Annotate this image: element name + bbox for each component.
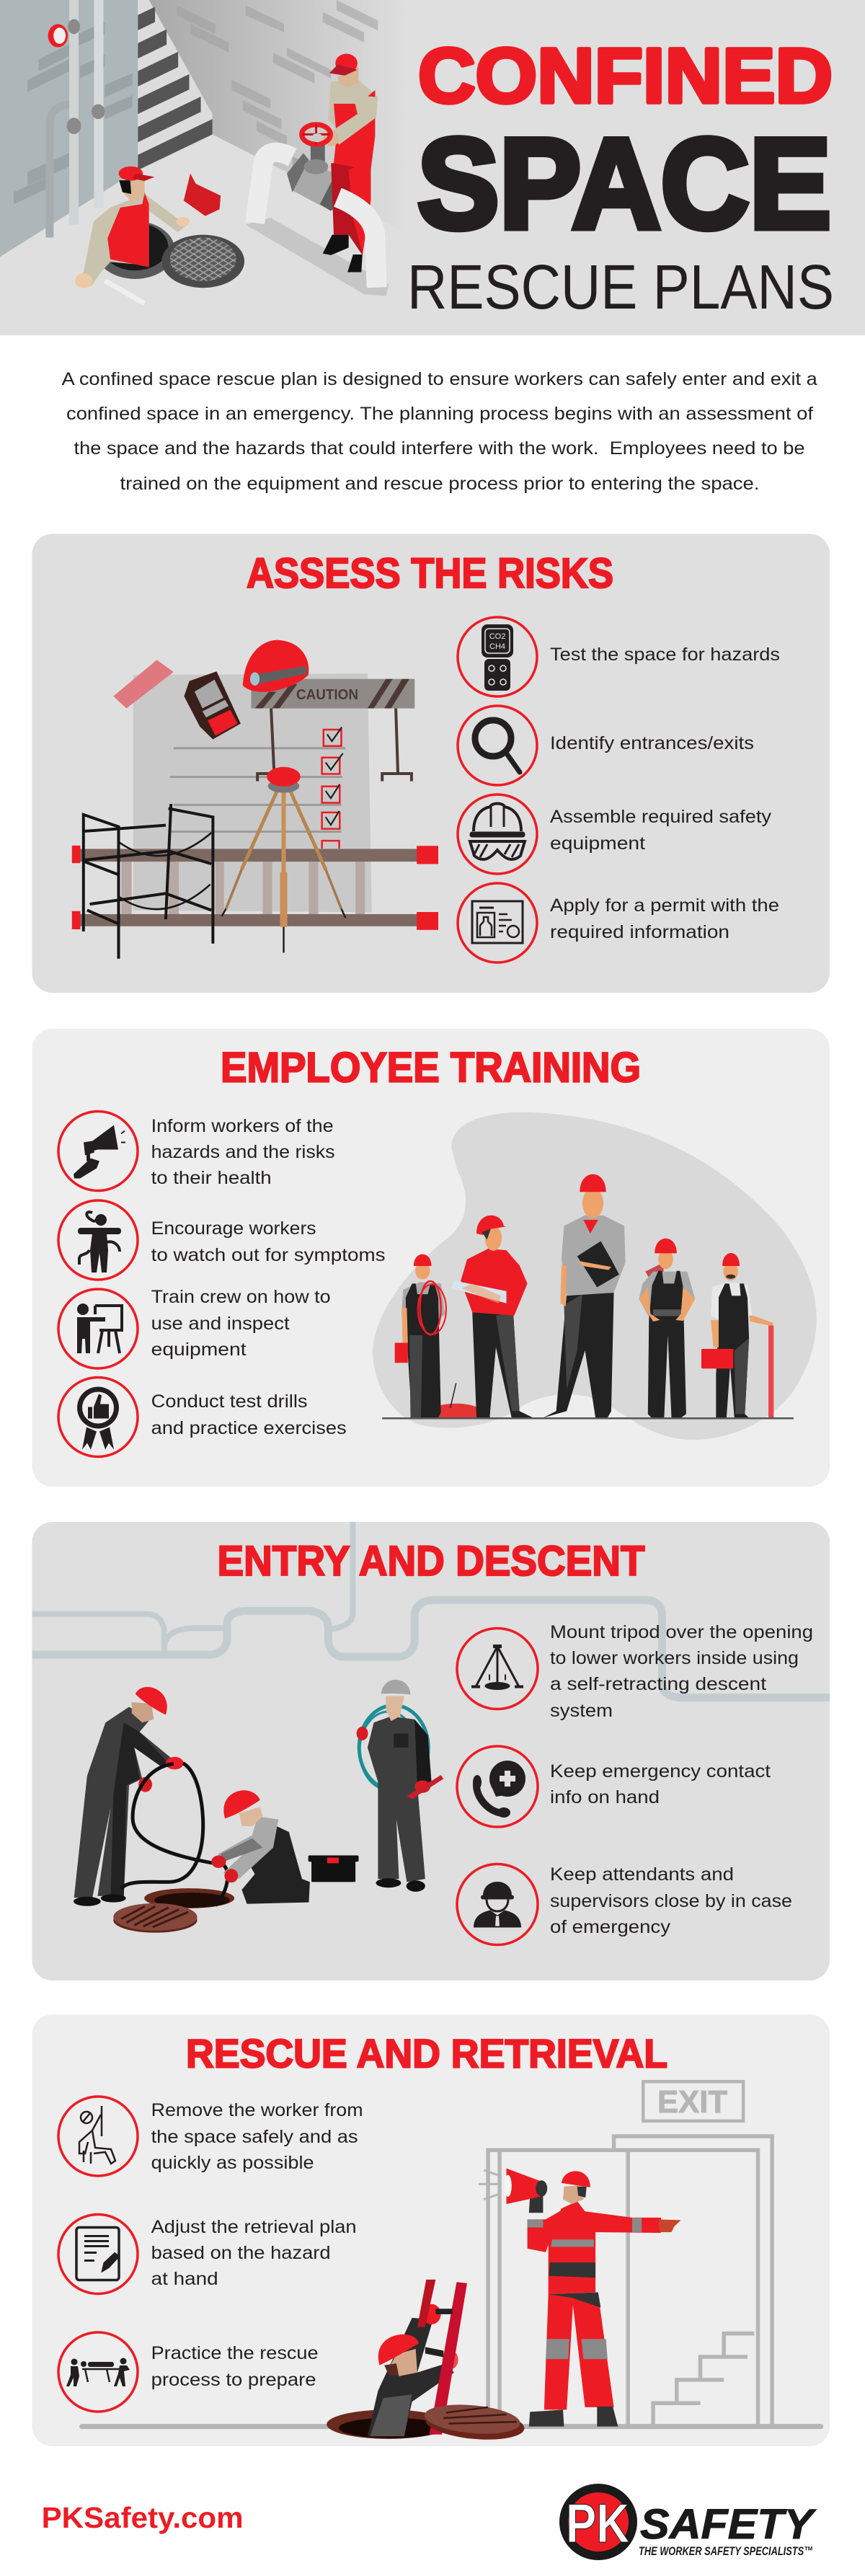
icon: supervisor <box>457 1864 538 1945</box>
text: train crew <box>151 1287 331 1360</box>
black hose <box>121 1763 228 1906</box>
text: train crew: equipment <box>151 1340 247 1360</box>
text: emergency contact: info on hand <box>550 1787 660 1807</box>
heading: assess the risks: ASSESS THE RISKS <box>247 550 613 597</box>
text: conduct test drills <box>151 1391 347 1438</box>
icon: instructor at board <box>58 1289 138 1368</box>
text: assemble equipment <box>550 807 772 854</box>
text: adjust retrieval: at hand <box>151 2269 218 2289</box>
manhole cover <box>161 235 244 288</box>
text: apply for permit: Apply for a permit with the <box>550 895 779 916</box>
ground line <box>382 1417 794 1420</box>
text: mount tripod: a self-retracting descent <box>550 1674 766 1694</box>
text: emergency contact: Keep emergency contact <box>550 1761 771 1781</box>
icon: gas detector <box>458 617 537 696</box>
red hard hat <box>243 640 309 692</box>
intro paragraph: trained on the equipment and rescue process prior to entering the space. <box>120 474 760 494</box>
text: adjust retrieval: Adjust the retrieval plan <box>151 2217 357 2237</box>
text: train crew: use and inspect <box>151 1314 290 1334</box>
worker 4 woman <box>639 1239 695 1417</box>
text: remove the worker <box>151 2100 363 2173</box>
heading: entry and descent: ENTRY AND DESCENT <box>218 1538 644 1585</box>
text: keep attendants: supervisors close by in case <box>550 1891 792 1911</box>
text: apply for permit <box>550 895 779 942</box>
text: apply for permit: required information <box>550 922 729 942</box>
heading: employee training: EMPLOYEE TRAINING <box>221 1044 641 1092</box>
text: conduct test drills: Conduct test drills <box>151 1391 308 1412</box>
staircase <box>138 0 213 172</box>
worker in manhole <box>75 167 190 288</box>
pipe and valve <box>255 145 350 223</box>
black toolbox <box>309 1856 358 1882</box>
text: remove the worker: quickly as possible <box>151 2153 314 2173</box>
worker 2 with blueprints <box>451 1216 533 1417</box>
worker climbing <box>368 2304 458 2436</box>
exit door and stairs <box>479 2136 772 2425</box>
checklist paper <box>133 673 372 912</box>
illustration label: caution: CAUTION <box>296 687 358 703</box>
worker 1 with cable <box>395 1254 446 1417</box>
worker standing bent over <box>74 1687 184 1906</box>
firefighter <box>528 2171 681 2427</box>
illustration: background pipes <box>32 1522 830 1698</box>
text: remove the worker: the space safely and as <box>151 2127 358 2147</box>
heading: rescue and retrieval: RESCUE AND RETRIEVAL <box>186 2030 667 2076</box>
title: SPACE: SPACE <box>417 112 831 255</box>
text: keep attendants: Keep attendants and <box>550 1864 734 1885</box>
text: inform workers: to their health <box>151 1168 272 1188</box>
radio meter <box>184 671 241 739</box>
megaphone <box>505 2169 547 2204</box>
open manhole <box>327 2409 451 2439</box>
footer: PK Safety logo: SAFETY <box>640 2501 817 2548</box>
icon: magnifier <box>458 706 537 785</box>
surveying tripod <box>222 790 345 952</box>
text: inform workers: Inform workers of the <box>151 1116 334 1136</box>
icon: award ribbon <box>58 1377 138 1456</box>
icon: wall alarm <box>48 25 68 48</box>
worker 5 with case and cane <box>701 1253 773 1418</box>
icon: red toolbox <box>184 174 221 216</box>
text: conduct test drills: and practice exercises <box>151 1418 347 1438</box>
intro paragraph: confined space in an emergency. The planning process begins with an assessment of <box>66 404 813 424</box>
illustration: firefighter directing rescue at exit door <box>82 2081 821 2443</box>
illustration: workers lowering hose into manhole <box>74 1680 443 1933</box>
text: encourage workers: to watch out for symptoms <box>151 1245 386 1265</box>
panel: employee training <box>32 1029 830 1487</box>
text: practice rescue: process to prepare <box>151 2370 316 2390</box>
text: practice rescue: Practice the rescue <box>151 2343 319 2363</box>
title: CONFINED: CONFINED <box>418 32 833 119</box>
text: mount tripod: Mount tripod over the opening <box>550 1622 813 1642</box>
worker kneeling <box>211 1790 310 1904</box>
text: assemble equipment: equipment <box>550 833 645 854</box>
icon: body symptoms <box>58 1200 138 1280</box>
icon: emergency phone <box>457 1746 538 1827</box>
exit sign text: EXIT <box>657 2084 727 2120</box>
footer: website: PKSafety.com <box>42 2501 244 2534</box>
text: mount tripod <box>550 1622 813 1721</box>
text: assemble equipment: Assemble required safety <box>550 807 772 827</box>
text: remove the worker: Remove the worker from <box>151 2100 363 2120</box>
worker with teal coil and wrench <box>357 1680 443 1892</box>
icon: permit card <box>458 883 537 962</box>
intro paragraph: A confined space rescue plan is designed to ensure workers can safely enter and exit a <box>62 369 817 389</box>
intro paragraph <box>62 369 817 494</box>
footer: PK Safety logo: THE WORKER SAFETY SPECIALISTS™ <box>639 2544 813 2558</box>
text: practice rescue <box>151 2343 319 2390</box>
text: adjust retrieval: based on the hazard <box>151 2243 331 2263</box>
manhole cover <box>422 2401 527 2443</box>
red hat on floor <box>420 1383 491 1417</box>
intro paragraph: the space and the hazards that could interfere with the work. Employees need to be <box>74 438 804 459</box>
panel: rescue and retrieval <box>32 2014 830 2446</box>
footer: PK Safety logo: PK <box>566 2493 629 2554</box>
text: keep attendants <box>550 1864 792 1937</box>
text: inform workers <box>151 1116 335 1188</box>
icon: helmet and goggles <box>458 795 537 874</box>
text: test the space: Test the space for hazards <box>550 645 780 665</box>
text: adjust retrieval <box>151 2217 357 2289</box>
text: identify entrances: Identify entrances/exits <box>550 733 754 753</box>
icon: document and pen <box>58 2215 138 2294</box>
hero banner <box>0 0 865 335</box>
hero illustration: workers at manhole and valve <box>0 0 430 304</box>
icon: megaphone <box>58 1112 138 1191</box>
grey blob background <box>373 1112 817 1440</box>
text: encourage workers <box>151 1218 386 1265</box>
worker at valve <box>302 54 378 273</box>
text: mount tripod: system <box>550 1701 613 1721</box>
text: mount tripod: to lower workers inside using <box>550 1648 799 1668</box>
open manhole <box>144 1888 234 1908</box>
caution barrier <box>251 679 414 782</box>
illustration: checklist, caution barrier, tripod and ladder <box>72 640 438 959</box>
panel: assess the risks <box>32 534 830 993</box>
text: train crew: Train crew on how to <box>151 1287 331 1307</box>
wrench <box>105 280 145 304</box>
manhole cover <box>113 1903 198 1933</box>
red ladder <box>417 2280 467 2435</box>
worker 3 with clipboard <box>543 1174 626 1417</box>
icon: tripod over opening <box>457 1628 538 1709</box>
ladder <box>121 860 365 915</box>
icon: gas detector: CH4 <box>489 642 505 651</box>
icon: stretcher team <box>58 2332 138 2412</box>
icon: worker on rope <box>58 2097 138 2176</box>
icon: gas detector: CO2 <box>489 632 505 641</box>
footer: PK Safety logo <box>559 2484 817 2560</box>
illustration: crew of five workers <box>373 1112 817 1440</box>
text: emergency contact <box>550 1761 771 1807</box>
text: encourage workers: Encourage workers <box>151 1218 316 1239</box>
text: keep attendants: of emergency <box>550 1917 671 1937</box>
text: inform workers: hazards and the risks <box>151 1142 335 1162</box>
scaffold frame <box>84 804 213 959</box>
panel: entry and descent <box>32 1522 830 1980</box>
